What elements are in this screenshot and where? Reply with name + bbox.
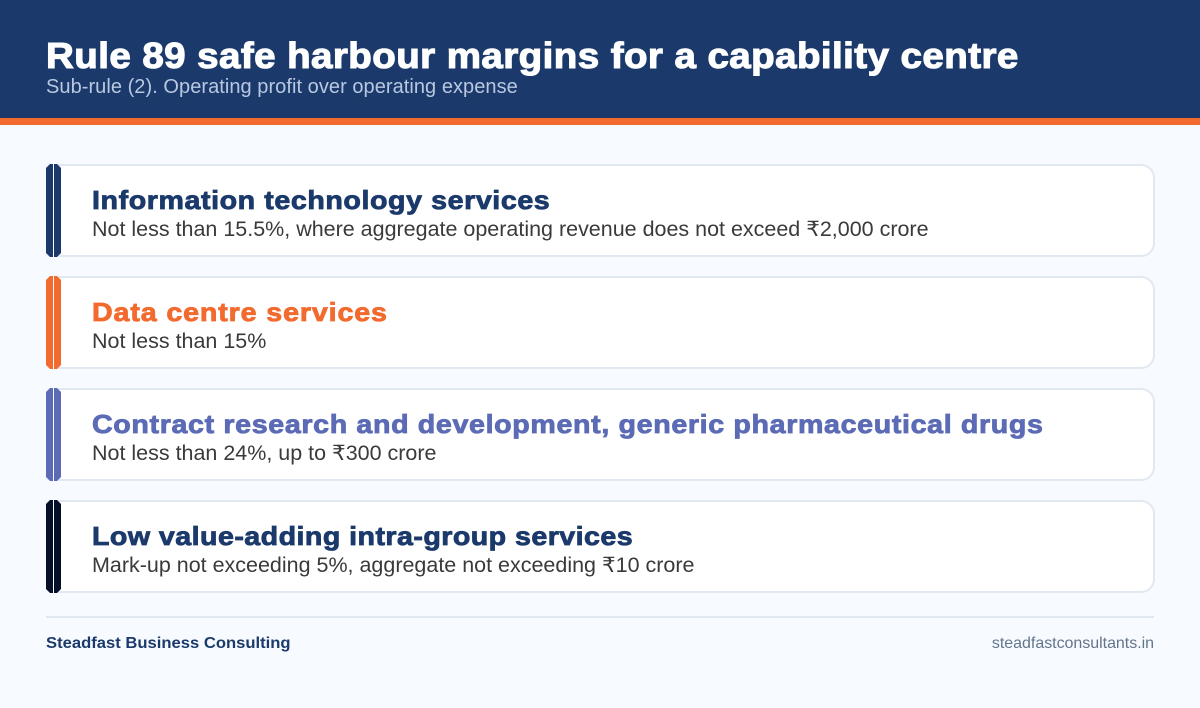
panel: information technology services [46, 164, 1155, 257]
text: information technology margin: Not less than 15.5%, where aggregate operating revenue does not exceed ₹2,000 crore [92, 218, 929, 241]
subtitle: Sub-rule (2). Operating profit over operating expense [46, 76, 518, 98]
header band [0, 0, 1200, 125]
panel: data centre services [46, 276, 1155, 369]
heading: data centre services: Data centre services [92, 297, 388, 327]
text: data centre margin: Not less than 15% [92, 330, 266, 353]
text: low value-adding mark-up: Mark-up not exceeding 5%, aggregate not exceeding ₹10 crore [92, 554, 694, 577]
accent bar: dark navy [46, 500, 61, 593]
text: contract research margin: Not less than 24%, up to ₹300 crore [92, 442, 436, 465]
panel: contract research and development [46, 388, 1155, 481]
panel: low value-adding services [46, 500, 1155, 593]
title: Rule 89 safe harbour margins for a capability centre [46, 35, 1019, 76]
footer: website: steadfastconsultants.in [992, 635, 1154, 652]
accent bar: indigo [46, 388, 61, 481]
heading: contract research and development: Contract research and development, generic pharmaceutical drugs [92, 409, 1044, 439]
heading: low value-adding services: Low value-adding intra-group services [92, 521, 633, 551]
footer: company name: Steadfast Business Consulting [46, 635, 291, 652]
accent bar: orange [46, 276, 61, 369]
orange rule [0, 118, 1200, 125]
accent bar: navy [46, 164, 61, 257]
heading: information technology services: Information technology services [92, 185, 550, 215]
